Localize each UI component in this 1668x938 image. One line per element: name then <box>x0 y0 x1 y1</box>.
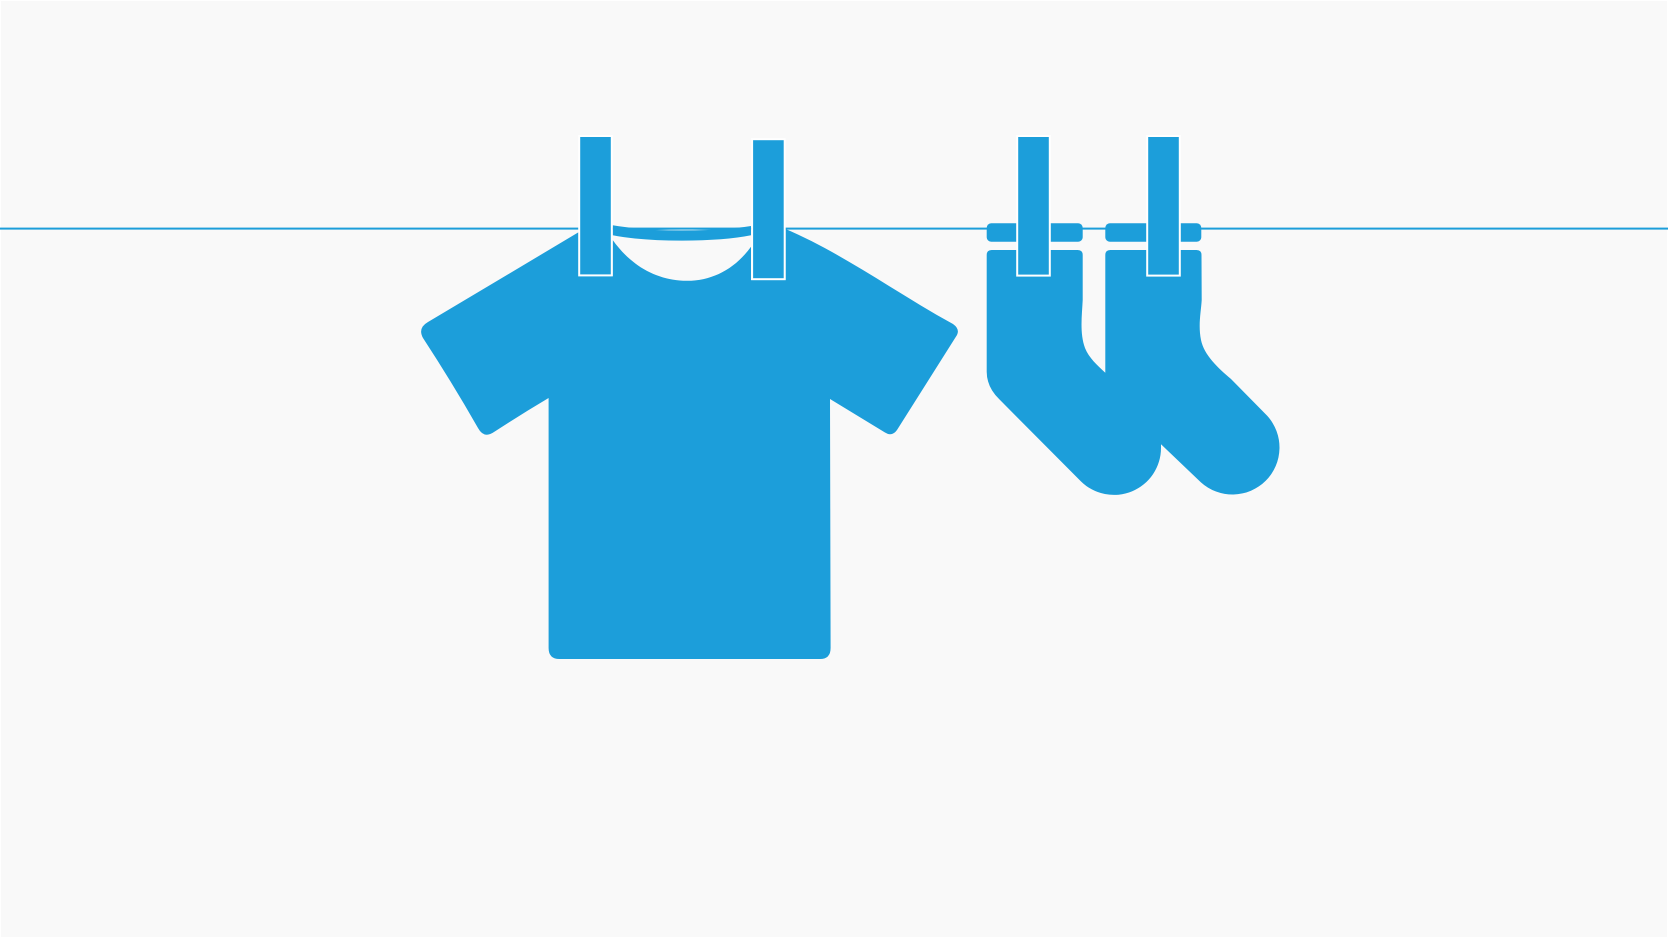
right sock cuff <box>1105 223 1201 242</box>
socks body <box>987 250 1279 495</box>
icon: clothes peg 3 <box>1017 136 1050 276</box>
icon: t-shirt <box>421 225 958 659</box>
icon: clothes peg 1 <box>579 136 612 275</box>
left sock cuff <box>987 223 1083 242</box>
icon: pair of socks <box>987 223 1279 495</box>
clothesline <box>0 228 1668 230</box>
t-shirt body <box>421 229 958 659</box>
collar highlight <box>655 229 708 232</box>
icon: clothes peg 4 <box>1147 136 1180 276</box>
t-shirt collar band <box>613 225 751 241</box>
icon: clothes peg 2 <box>752 139 785 279</box>
